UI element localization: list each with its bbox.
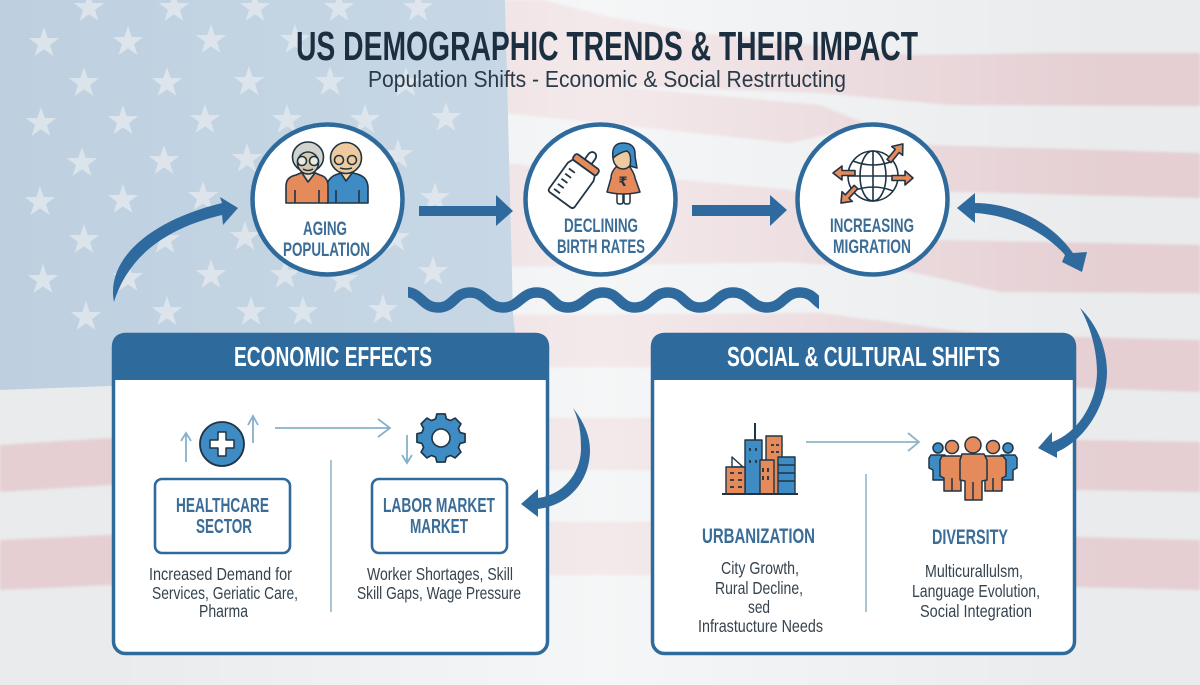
text: diversity details: Language Evolution, bbox=[912, 581, 1040, 601]
text: urbanization details: Infrastucture Needs bbox=[698, 616, 823, 636]
box: labor market bbox=[372, 479, 507, 553]
arrow: double-headed curve from migration bbox=[957, 193, 1087, 272]
label: aging population bbox=[283, 218, 370, 261]
box: healthcare sector bbox=[155, 479, 290, 553]
heading: economic effects: ECONOMIC EFFECTS bbox=[234, 341, 432, 372]
text: healthcare details bbox=[149, 564, 298, 621]
text: labor market details: Skill Gaps, Wage Pressure bbox=[357, 583, 521, 603]
icon: globe with arrows bbox=[833, 139, 913, 208]
label: declining birth rates: DECLINING bbox=[564, 215, 638, 237]
icon: gear bbox=[417, 414, 465, 462]
subtitle: Population Shifts - Economic & Social Restrrtucting bbox=[368, 66, 846, 92]
icon: medical cross bbox=[200, 422, 244, 466]
title: US DEMOGRAPHIC TRENDS & THEIR IMPACT bbox=[296, 23, 918, 69]
arrow: curve into labor market bbox=[521, 408, 590, 517]
icon: pregnant woman: ₹ bbox=[618, 175, 628, 190]
arrow: declining to migration bbox=[692, 195, 787, 226]
wave divider bbox=[405, 292, 832, 308]
text: healthcare details: Services, Geriatic Care, bbox=[152, 583, 298, 603]
arrow: aging to declining birth rates bbox=[419, 195, 513, 226]
box: labor market: MARKET bbox=[410, 516, 468, 538]
icon: city skyline bbox=[722, 423, 798, 494]
text: labor market details bbox=[357, 564, 521, 603]
thin arrow: urbanization to diversity bbox=[806, 433, 919, 451]
circle: declining birth rates bbox=[526, 124, 676, 274]
heading: urbanization: URBANIZATION bbox=[702, 525, 815, 548]
label: aging population: AGING bbox=[303, 218, 347, 240]
label: increasing migration: INCREASING bbox=[830, 215, 914, 237]
text: diversity details: Social Integration bbox=[920, 601, 1032, 621]
thin arrows: healthcare trends bbox=[181, 416, 412, 463]
icon: baby bottle bbox=[548, 144, 607, 209]
icon: diverse group of people bbox=[929, 437, 1017, 500]
text: urbanization details: sed bbox=[748, 597, 770, 617]
heading: social and cultural shifts: SOCIAL & CULTURAL SHIFTS bbox=[727, 341, 1000, 372]
vertical divider bbox=[865, 474, 867, 612]
text: diversity details bbox=[912, 561, 1040, 621]
text: healthcare details: Increased Demand for bbox=[149, 564, 292, 584]
label: aging population: POPULATION bbox=[283, 239, 370, 261]
arrow: curve into diversity bbox=[1038, 308, 1107, 458]
vertical divider bbox=[330, 460, 332, 612]
heading: diversity: DIVERSITY bbox=[932, 526, 1008, 549]
icon: elderly couple bbox=[286, 142, 368, 203]
label: declining birth rates bbox=[557, 215, 645, 258]
box: healthcare sector: SECTOR bbox=[196, 516, 252, 538]
label: increasing migration: MIGRATION bbox=[833, 236, 911, 258]
text: urbanization details bbox=[698, 558, 823, 636]
panel: social and cultural shifts bbox=[651, 333, 1076, 654]
text: healthcare details: Pharma bbox=[199, 601, 248, 621]
label: declining birth rates: BIRTH RATES bbox=[557, 236, 645, 258]
text: diversity details: Multicurallulsm, bbox=[925, 561, 1023, 581]
box: healthcare sector: HEALTHCARE bbox=[176, 495, 269, 517]
circle: increasing migration bbox=[798, 124, 948, 274]
label: increasing migration bbox=[830, 215, 914, 258]
text: urbanization details: City Growth, bbox=[721, 558, 799, 578]
text: urbanization details: Rural Decline, bbox=[715, 578, 803, 598]
box: labor market: LABOR MARKET bbox=[383, 495, 495, 517]
circle: aging population bbox=[252, 124, 402, 274]
panel: economic effects bbox=[112, 333, 549, 654]
text: labor market details: Worker Shortages, Skill bbox=[367, 564, 513, 584]
icon: pregnant woman bbox=[607, 143, 640, 204]
arrow: feedback curve into aging population bbox=[113, 197, 238, 302]
